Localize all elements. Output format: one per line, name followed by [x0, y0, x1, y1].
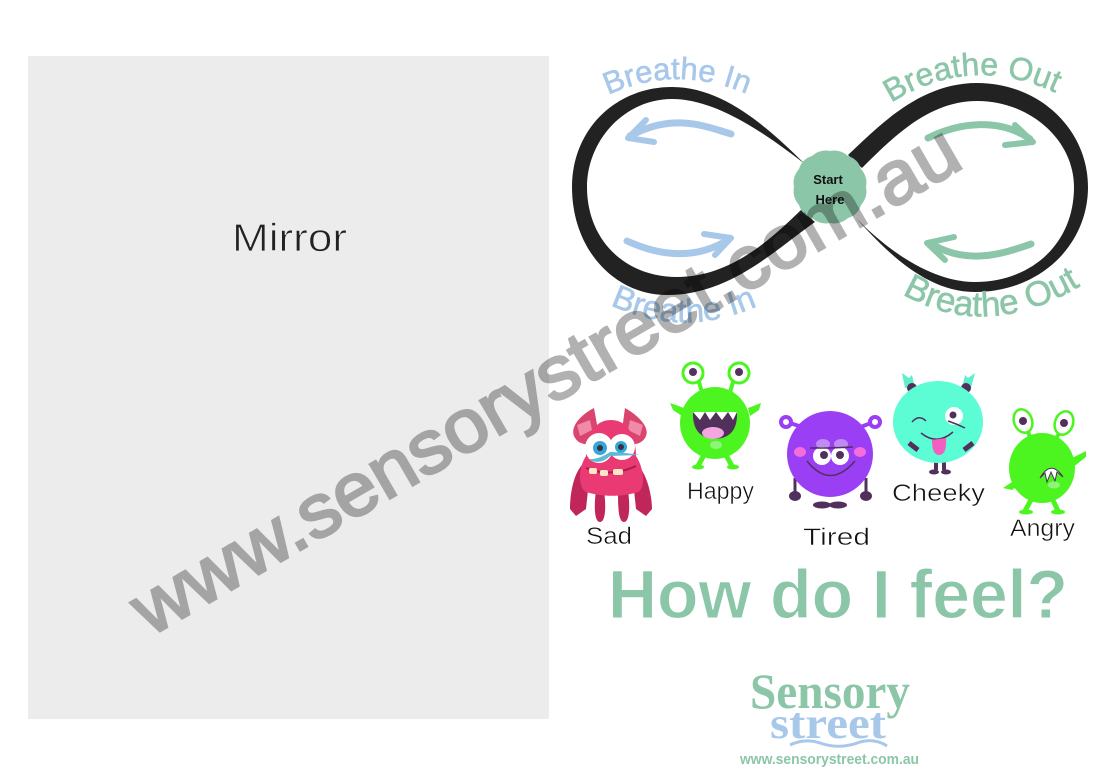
arrow: breathe in top: [628, 120, 731, 142]
monster: cheeky: [893, 373, 983, 474]
monster: angry: [1003, 407, 1086, 514]
arrow: breathe out bottom: [927, 237, 1031, 260]
start here badge: Here: [816, 192, 844, 207]
infinity loop: [572, 83, 1088, 295]
arrow: breathe out top: [928, 125, 1033, 145]
label: happy: Happy: [687, 478, 754, 505]
watermark: www.sensorystreet.com.au: [115, 107, 974, 651]
start here badge: Start: [813, 172, 843, 187]
label: breathe out top: Breathe Out: [882, 52, 1062, 102]
label: breathe out bottom: Breathe Out: [904, 268, 1081, 317]
arrow: breathe in bottom: [627, 234, 731, 255]
start here badge: [794, 151, 866, 223]
label: breathe in bottom: Breathe In: [612, 284, 756, 323]
heading: how do i feel: How do I feel?: [608, 556, 1068, 633]
logo: sensory street: www.sensorystreet.com.au: [739, 752, 919, 768]
label: angry: Angry: [1010, 515, 1075, 542]
label: sad: Sad: [586, 523, 632, 550]
monster: tired: [781, 411, 880, 508]
infinity breathing diagram: [572, 52, 1088, 323]
monster: sad: [570, 408, 652, 522]
label: breathe in top: Breathe In: [602, 56, 750, 94]
label: tired: Tired: [803, 524, 870, 551]
logo: sensory street: Sensory: [750, 663, 910, 719]
monster: happy: [670, 363, 761, 470]
logo: sensory street: street: [770, 699, 886, 748]
label: cheeky: Cheeky: [892, 480, 985, 507]
logo: sensory street: [739, 663, 919, 768]
mirror label: Mirror: [232, 217, 347, 260]
monsters row: [570, 363, 1086, 551]
